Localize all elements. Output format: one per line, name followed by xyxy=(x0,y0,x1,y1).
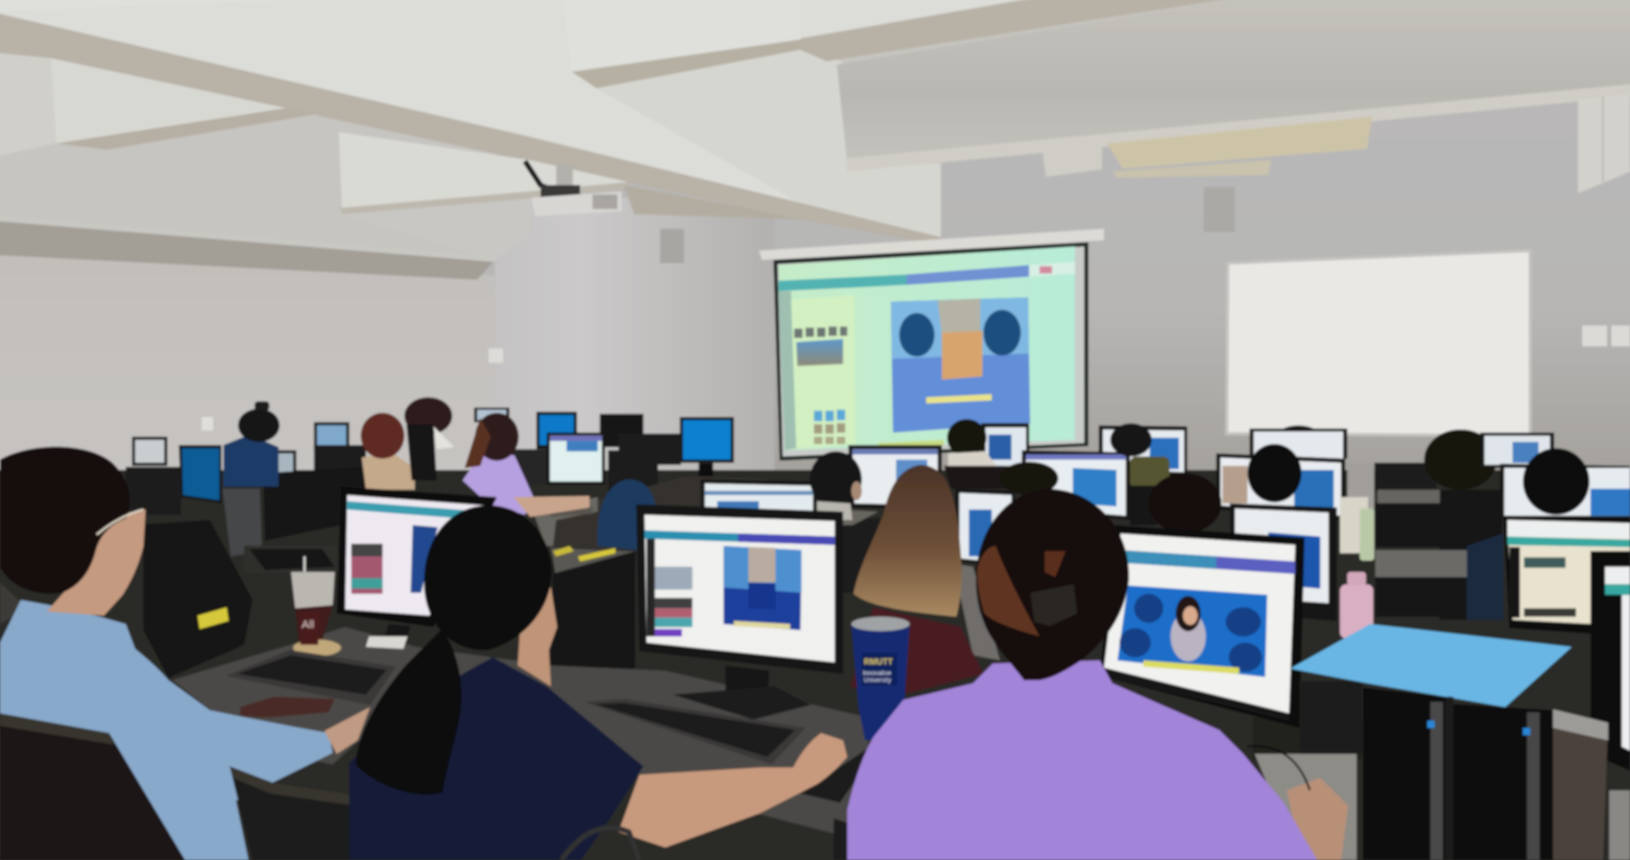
person: back right olive xyxy=(1110,423,1169,525)
person: woman in navy polo xyxy=(349,505,847,860)
iced coffee cup xyxy=(291,556,341,656)
person: man in navy xyxy=(224,401,280,487)
screen housing xyxy=(759,229,1104,260)
person: woman with red-brown hair xyxy=(361,413,415,490)
person: back right xyxy=(1272,425,1324,459)
plaid bag xyxy=(850,607,983,694)
pink bottle xyxy=(1340,572,1373,639)
back row people xyxy=(224,397,1497,517)
person: seated at centre with glasses xyxy=(810,451,862,520)
monitor: centre front xyxy=(636,504,843,720)
desktop towers front right xyxy=(1363,687,1553,860)
monitor: far right xyxy=(1503,516,1630,636)
mouse pad xyxy=(800,749,867,803)
keyboard centre xyxy=(584,699,806,764)
back left desks and dark computers xyxy=(0,450,852,624)
upper right duct box xyxy=(1578,94,1630,193)
chair: front left xyxy=(0,713,185,860)
wall speakers xyxy=(660,187,1235,263)
back wall xyxy=(478,62,1630,470)
side wall section by projector xyxy=(495,198,774,470)
keyboard left xyxy=(226,650,396,705)
tumbler: Innovative xyxy=(863,670,892,677)
whiteboard xyxy=(1227,251,1530,436)
ceiling and beams xyxy=(0,0,1630,280)
person: woman in purple polo at back xyxy=(463,413,589,517)
person: with scarf at centre back xyxy=(944,419,1006,489)
left wall xyxy=(0,250,495,470)
chair: front centre xyxy=(230,766,493,860)
person: back far right xyxy=(1424,429,1497,490)
monitor: right front xyxy=(1100,525,1305,728)
mid row heads xyxy=(597,419,1589,660)
base dark background xyxy=(0,470,1630,860)
smartphone xyxy=(240,697,335,718)
person: woman in purple polo xyxy=(847,489,1348,860)
projection screen xyxy=(773,242,1088,461)
person: head behind centre xyxy=(1000,462,1058,495)
drinking glass xyxy=(1553,709,1608,860)
mid row monitors xyxy=(701,423,1630,621)
back row monitors xyxy=(126,408,734,515)
right side towers at back xyxy=(1347,463,1502,620)
right front desk and carpet xyxy=(1253,718,1630,860)
projector xyxy=(525,161,622,216)
vent above air conditioner xyxy=(1043,147,1102,177)
air conditioner xyxy=(1107,116,1372,178)
front desk xyxy=(173,627,868,842)
dark gap behind towers xyxy=(1299,681,1362,754)
person: woman in dark xyxy=(404,397,454,480)
monitor: edge right xyxy=(1590,551,1630,771)
person: blue hooded back xyxy=(597,479,657,550)
blue plastic bag xyxy=(1290,624,1572,707)
person: woman with long brown hair xyxy=(853,465,1000,660)
person: woman behind right xyxy=(1149,473,1221,533)
tumbler: RMUTT xyxy=(864,656,893,666)
person: head right of centre xyxy=(1247,444,1368,553)
water bottle right xyxy=(1360,509,1374,561)
black tower under desk xyxy=(549,546,635,704)
person: man far right xyxy=(1467,448,1589,620)
tumbler xyxy=(851,617,910,740)
floor and box at left xyxy=(0,776,31,860)
wall switches xyxy=(202,325,1630,431)
upper room background xyxy=(0,0,1630,478)
iced coffee cup: All xyxy=(301,619,314,631)
tumbler: University xyxy=(864,677,892,684)
person: man in denim shirt xyxy=(0,447,370,860)
chair with black jacket xyxy=(143,520,253,678)
chair: front centre right xyxy=(834,818,967,860)
monitor: left front xyxy=(337,487,497,649)
